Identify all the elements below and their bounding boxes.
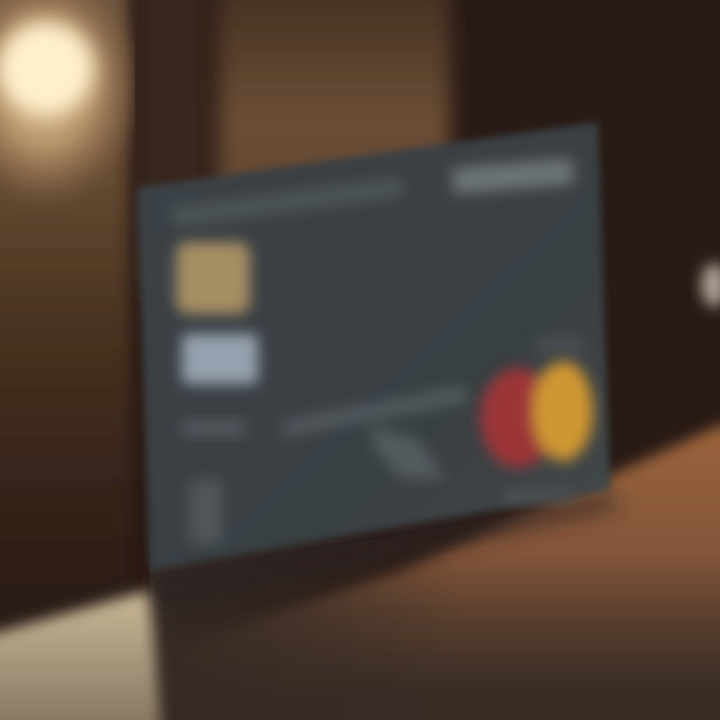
card header text left	[172, 178, 402, 226]
credit card	[137, 122, 610, 570]
card logo top mark	[535, 336, 585, 354]
red circle	[480, 368, 556, 468]
shadow under card	[150, 495, 620, 610]
orange circle	[533, 361, 593, 461]
card contact panel	[182, 334, 258, 384]
mastercard logo	[480, 361, 593, 468]
card text column	[190, 480, 222, 544]
table surface	[140, 425, 720, 720]
lamp glow	[0, 0, 135, 198]
bright table corner	[0, 590, 162, 720]
card small text left	[182, 420, 244, 436]
card logo label	[505, 490, 575, 504]
wall panel: centre	[218, 0, 450, 270]
card chip	[176, 242, 250, 314]
icon: right-edge highlight	[701, 263, 720, 307]
wall panel: left	[0, 0, 130, 660]
card body	[137, 122, 610, 570]
card header text right	[452, 158, 574, 194]
card number text	[282, 385, 468, 480]
wall strip: dark between panels	[135, 0, 210, 290]
